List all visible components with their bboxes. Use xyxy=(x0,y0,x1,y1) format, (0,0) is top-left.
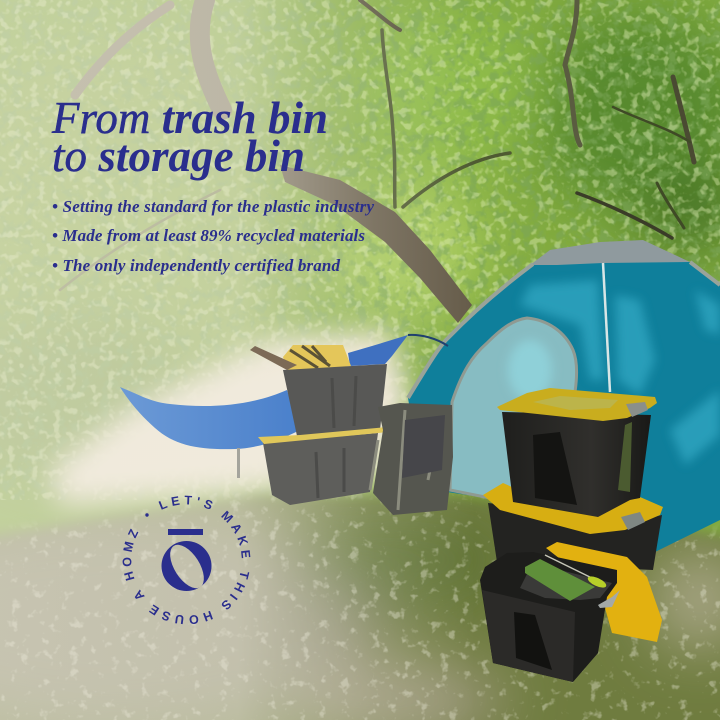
badge dot xyxy=(145,513,149,517)
bottom bin latch xyxy=(598,590,620,608)
tent roof flap xyxy=(530,240,690,265)
circular badge xyxy=(122,496,250,624)
bullet: certified brand: • The only independently certified brand xyxy=(52,256,340,275)
top bin body xyxy=(502,412,651,517)
upper back bin xyxy=(283,364,387,436)
hammock rope xyxy=(408,335,448,346)
bottom bin contents xyxy=(520,570,612,600)
bottom bin recessed handle xyxy=(514,612,552,670)
badge logo: letter o xyxy=(162,541,212,591)
tree trunks and branches xyxy=(60,0,694,323)
door reflection xyxy=(508,340,552,400)
bullet: recycled materials: • Made from at least 89% recycled materials xyxy=(52,226,365,245)
hammock right wing xyxy=(348,335,408,366)
top bin side gap xyxy=(618,422,632,492)
bullet: industry standard: • Setting the standard for the plastic industry xyxy=(52,197,374,216)
middle bin lid xyxy=(483,483,663,534)
badge logo: bar xyxy=(168,529,203,535)
lower back bin body xyxy=(263,433,378,505)
wooden log xyxy=(250,346,297,370)
middle bin body xyxy=(488,503,662,570)
top bin latch xyxy=(626,402,648,417)
bin ribs xyxy=(316,376,356,498)
badge ring text: LET'S MAKE THIS HOUSE A HOMZ xyxy=(122,496,250,624)
middle bin latch xyxy=(621,512,645,530)
back storage bins, stacked xyxy=(250,345,388,505)
tent pole xyxy=(603,263,610,392)
background: forest canopy xyxy=(0,0,720,543)
bottom bin body xyxy=(480,552,617,682)
hammock xyxy=(120,335,448,478)
ground: grass and dirt xyxy=(0,489,720,720)
backpack xyxy=(370,403,453,515)
tent door window xyxy=(450,318,580,500)
lower back bin lid xyxy=(258,427,388,444)
headline: From trash bin xyxy=(52,93,328,143)
tent fabric highlights xyxy=(520,280,720,465)
tent xyxy=(408,240,720,552)
fishing rod and float xyxy=(545,555,600,582)
yellow board in top bin xyxy=(283,345,351,372)
top bin lid xyxy=(497,388,657,421)
front stacked storage bins xyxy=(480,388,663,682)
green sleeping pad xyxy=(525,559,595,601)
tent body xyxy=(408,250,720,552)
bright river gap behind hammock xyxy=(50,330,410,505)
tent edge xyxy=(408,264,533,398)
top bin recessed handle xyxy=(533,432,577,505)
open yellow lid xyxy=(546,542,662,642)
bottom bin body sheen xyxy=(482,590,575,682)
rope xyxy=(290,346,330,368)
headline: to storage bin xyxy=(52,131,305,181)
hammock body xyxy=(120,387,300,449)
hammock stand xyxy=(237,448,240,478)
main trunk xyxy=(280,165,472,323)
bullet list xyxy=(52,197,374,275)
